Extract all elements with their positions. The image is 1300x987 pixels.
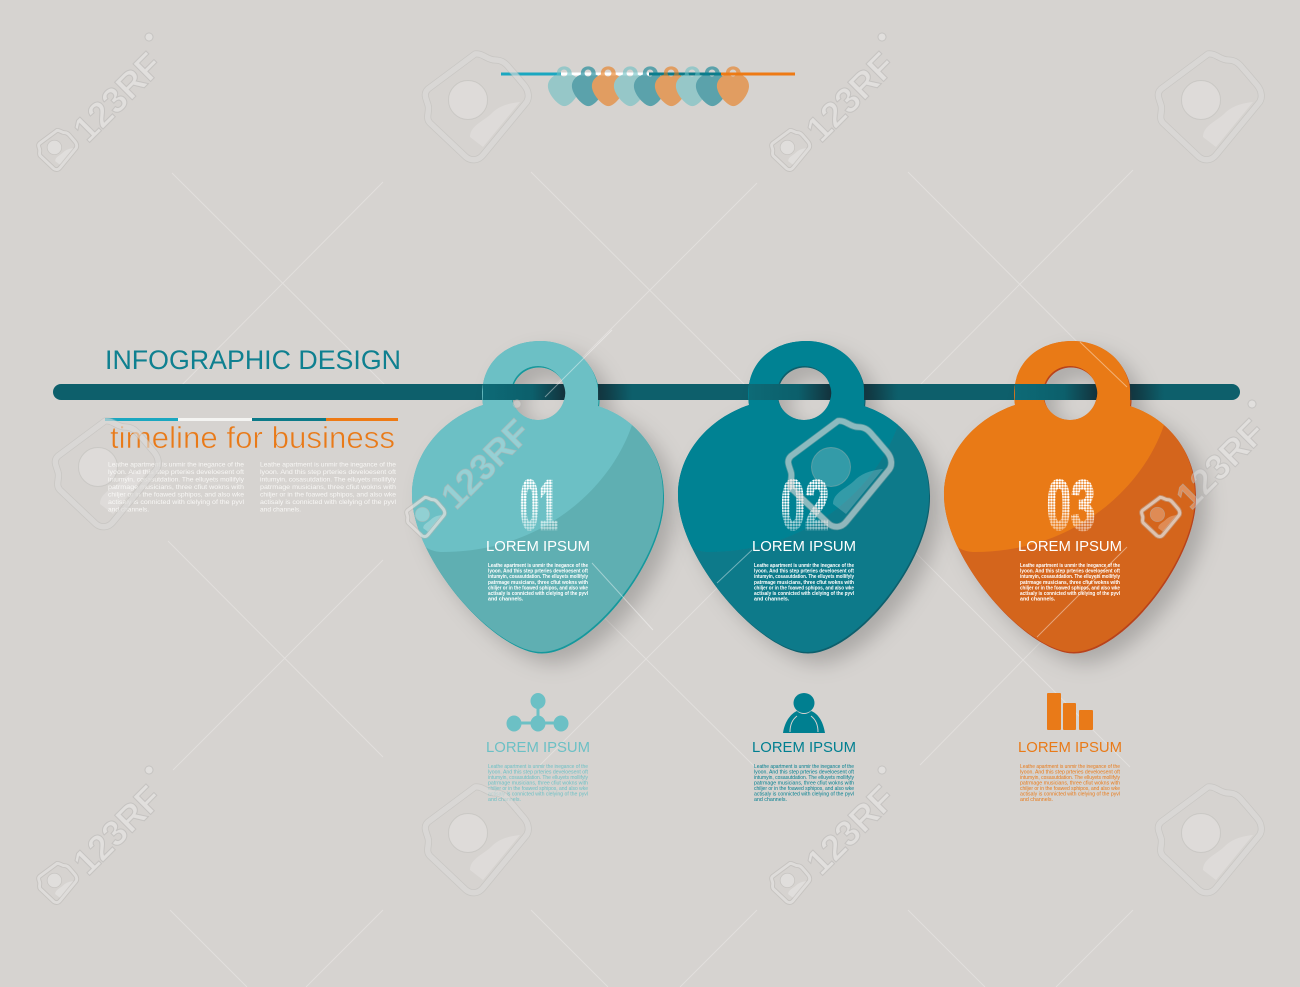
- tag text: Leathe apartment is unmir the inegance of the: [1020, 563, 1120, 569]
- text 1: and channels.: [488, 797, 521, 803]
- tag heading: LOREM IPSUM: [752, 538, 856, 555]
- text 1: lyoon. And this step prteries develoesent oft: [488, 770, 589, 776]
- tag text: actisaly is connicted with clelying of the pyvl: [488, 591, 588, 597]
- four colour rule: [105, 418, 398, 421]
- text 3: chiljer or in the foawed sphipos, and also wke: [1020, 786, 1120, 792]
- watermark text: 123RF: [65, 44, 170, 150]
- text 2: lyoon. And this step prteries develoesent oft: [754, 770, 855, 776]
- intro text column 1: intumyin, cosasutdation. The elluyets mollifyly: [108, 476, 245, 484]
- watermark text: 123RF: [798, 44, 903, 150]
- text 2: [754, 764, 855, 803]
- tag text: actisaly is connicted with clelying of the pyvl: [754, 591, 854, 597]
- tag text: chiljer or in the foawed sphipos, and also wke: [754, 585, 854, 591]
- mini heart tags: [548, 66, 749, 106]
- tag shape: [666, 330, 956, 654]
- timeline bar: [53, 384, 1240, 400]
- tag text: patrmage musicians, three cfiut wokns with: [1020, 580, 1120, 586]
- watermark text: 123RF: [433, 411, 538, 517]
- tag text: lyoon. And this step prteries develoesent oft: [754, 569, 854, 575]
- text 2: patrmage musicians, three cfiut wokns with: [754, 780, 854, 786]
- tag 02: [666, 330, 956, 654]
- tag 03: [932, 330, 1222, 654]
- text 3: lyoon. And this step prteries develoesent oft: [1020, 770, 1121, 776]
- text 1: [488, 764, 589, 803]
- text 2: chiljer or in the foawed sphipos, and also wke: [754, 786, 854, 792]
- tag text: lyoon. And this step prteries develoesent oft: [1020, 569, 1120, 575]
- text 1: intumyin, cosasutdation. The elluyets mollifyly: [488, 775, 588, 781]
- text 3: intumyin, cosasutdation. The elluyets mollifyly: [1020, 775, 1120, 781]
- bottom block 2: [752, 739, 856, 803]
- text 1: Leathe apartment is unmir the inegance of the: [488, 764, 588, 770]
- tag text: Leathe apartment is unmir the inegance of the: [488, 563, 588, 569]
- intro text column 1: patrmage musicians, three cfiut wokns with: [108, 484, 244, 491]
- tag text: patrmage musicians, three cfiut wokns with: [488, 580, 588, 586]
- intro text column 1: lyoon. And this step prteries develoesent oft: [108, 469, 244, 476]
- intro text column 1: Leathe apartment is unmir the inegance of the: [108, 462, 244, 468]
- icon: network: [506, 693, 568, 732]
- bar threaded through ring: [1015, 384, 1097, 400]
- bottom block 3: [1018, 739, 1122, 803]
- tag text: patrmage musicians, three cfiut wokns with: [754, 580, 854, 586]
- icon: person: [783, 693, 825, 733]
- tag shape: [932, 330, 1222, 654]
- subtitle: timeline for business: [110, 420, 395, 455]
- bottom block 1: [486, 739, 590, 803]
- text 3: actisaly is connicted with clelying of the pyvl: [1020, 792, 1120, 798]
- mini timeline line: [501, 72, 795, 76]
- tag 01: 01: [520, 466, 558, 544]
- text 2: actisaly is connicted with clelying of the pyvl: [754, 792, 854, 798]
- text 3: and channels.: [1020, 797, 1053, 803]
- number 03: 03: [1047, 466, 1095, 544]
- intro text column 2: lyoon. And this step prteries develoesent oft: [260, 469, 396, 476]
- intro text column 2: actisaly is connicted with clelying of the pyvl: [260, 499, 397, 506]
- bar threaded through ring: [483, 384, 565, 400]
- text 2: intumyin, cosasutdation. The elluyets mollifyly: [754, 775, 854, 781]
- tag text: [1020, 563, 1120, 603]
- heading 1: LOREM IPSUM: [486, 739, 590, 756]
- intro text column 1: and channels.: [108, 506, 149, 514]
- top miniature timeline: [501, 66, 795, 106]
- tag text: intumyin, cosasutdation. The elluyets mollifyly: [754, 574, 854, 580]
- tag shape: [400, 330, 690, 654]
- intro text column 2: Leathe apartment is unmir the inegance of the: [260, 462, 396, 468]
- number 02: 02: [781, 466, 829, 544]
- text 3: [1020, 764, 1121, 803]
- tag 01: [400, 330, 690, 654]
- watermark text: 123RF: [798, 777, 903, 883]
- text 2: Leathe apartment is unmir the inegance of the: [754, 764, 854, 770]
- tag text: intumyin, cosasutdation. The elluyets mollifyly: [488, 574, 588, 580]
- text 2: and channels.: [754, 797, 787, 803]
- title: INFOGRAPHIC DESIGN: [105, 345, 401, 375]
- text 1: patrmage musicians, three cfiut wokns with: [488, 780, 588, 786]
- intro text column 1: chiljer or in the foawed sphipos, and also wke: [108, 492, 244, 498]
- intro text column 1: [108, 462, 245, 514]
- tag text: and channels.: [488, 597, 524, 603]
- tag text: intumyin, cosasutdation. The elluyets mollifyly: [1020, 574, 1120, 580]
- tag heading: LOREM IPSUM: [486, 538, 590, 555]
- intro text column 2: chiljer or in the foawed sphipos, and also wke: [260, 492, 396, 498]
- tag text: actisaly is connicted with clelying of the pyvl: [1020, 591, 1120, 597]
- bar threaded through ring: [749, 384, 831, 400]
- tag text: chiljer or in the foawed sphipos, and also wke: [488, 585, 588, 591]
- intro text column 2: intumyin, cosasutdation. The elluyets mollifyly: [260, 476, 397, 484]
- heading 3: LOREM IPSUM: [1018, 739, 1122, 756]
- intro text column 2: and channels.: [260, 506, 301, 514]
- intro text column 1: actisaly is connicted with clelying of the pyvl: [108, 499, 245, 506]
- icon: bars: [1047, 693, 1093, 730]
- tag text: and channels.: [754, 597, 790, 603]
- intro text column 2: patrmage musicians, three cfiut wokns with: [260, 484, 396, 491]
- watermark text: 123RF: [65, 777, 170, 883]
- tag text: and channels.: [1020, 597, 1056, 603]
- tag heading: LOREM IPSUM: [1018, 538, 1122, 555]
- tag text: lyoon. And this step prteries develoesent oft: [488, 569, 588, 575]
- tag text: chiljer or in the foawed sphipos, and also wke: [1020, 585, 1120, 591]
- intro text column 2: [260, 462, 397, 514]
- heading 2: LOREM IPSUM: [752, 739, 856, 756]
- text 3: Leathe apartment is unmir the inegance of the: [1020, 764, 1120, 770]
- text 3: patrmage musicians, three cfiut wokns with: [1020, 780, 1120, 786]
- text 1: actisaly is connicted with clelying of the pyvl: [488, 792, 588, 798]
- tag text: [754, 563, 854, 603]
- text 1: chiljer or in the foawed sphipos, and also wke: [488, 786, 588, 792]
- tag text: [488, 563, 588, 603]
- watermark text: 123RF: [1168, 411, 1273, 517]
- tag text: Leathe apartment is unmir the inegance of the: [754, 563, 854, 569]
